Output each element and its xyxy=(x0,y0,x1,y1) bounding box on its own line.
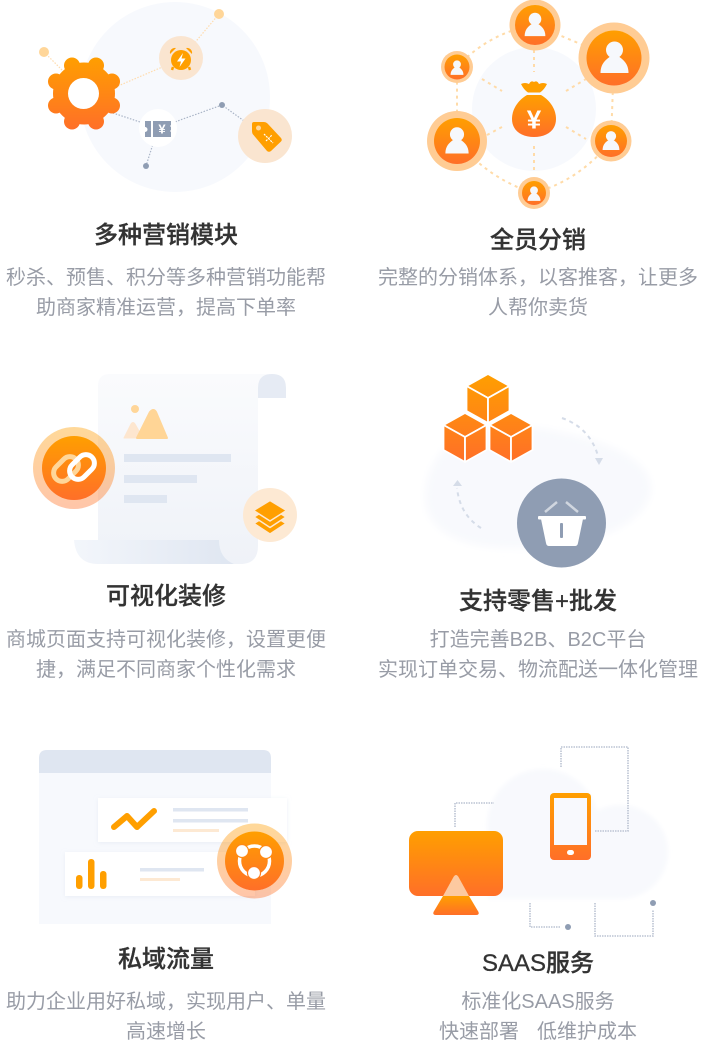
pale cloud xyxy=(487,769,668,899)
heading: 全员分销 xyxy=(490,227,586,254)
description xyxy=(6,267,326,319)
slate dots xyxy=(143,102,225,169)
peach dots xyxy=(39,9,224,57)
illustration: cloud and devices xyxy=(409,746,656,937)
illustration: browser window xyxy=(39,750,292,902)
icon: money bag xyxy=(512,81,556,137)
pale blob xyxy=(425,426,651,548)
card: line chart xyxy=(98,798,287,842)
image placeholder xyxy=(124,405,167,438)
avatar: small left xyxy=(441,51,473,83)
arrow: cubes to basket xyxy=(562,418,603,465)
heading: 支持零售+批发 xyxy=(459,588,617,615)
panel: team distribution xyxy=(378,0,698,319)
heading: 私域流量 xyxy=(118,946,214,973)
avatar: bottom xyxy=(518,177,550,209)
illustration: cubes and basket xyxy=(444,375,606,568)
icon: gear xyxy=(48,58,120,130)
top scroll curl xyxy=(258,374,286,398)
description: 商城页面支持可视化装修，设置更便 xyxy=(6,629,326,651)
description xyxy=(378,629,698,681)
icon: stacked cubes xyxy=(444,374,532,462)
avatar: large right xyxy=(578,22,650,94)
avatar: large left xyxy=(427,111,487,171)
illustration: marketing network xyxy=(39,9,292,169)
description xyxy=(378,266,698,319)
window header xyxy=(39,750,271,773)
page sheet xyxy=(98,374,272,564)
bottom scroll fold xyxy=(74,540,234,564)
window body xyxy=(39,773,271,924)
heading: SAAS服务 xyxy=(482,950,594,977)
panel: SAAS service xyxy=(409,746,656,1043)
description: 打造完善B2B、B2C平台 xyxy=(430,629,646,651)
description: 快速部署 低维护成本 xyxy=(439,1021,637,1043)
icon: layers xyxy=(243,488,297,542)
description xyxy=(6,629,326,681)
icon: basket xyxy=(517,478,606,568)
description: 助商家精准运营，提高下单率 xyxy=(36,297,296,319)
illustration: document page xyxy=(33,374,297,564)
panel: private traffic xyxy=(6,750,326,1043)
description: 高速增长 xyxy=(126,1021,206,1043)
icon: coupon: ¥ xyxy=(158,122,166,136)
description: 实现订单交易、物流配送一体化管理 xyxy=(378,659,698,681)
card: bar chart xyxy=(65,852,255,896)
illustration: distribution network xyxy=(427,0,650,209)
heading: 多种营销模块 xyxy=(94,222,238,249)
icon: chain link xyxy=(33,427,115,509)
connector lines xyxy=(44,14,265,166)
description: 标准化SAAS服务 xyxy=(461,991,615,1013)
panel: marketing modules xyxy=(6,9,326,319)
description xyxy=(439,991,637,1043)
description: 秒杀、预售、积分等多种营销功能帮 xyxy=(6,267,326,289)
pale background circle xyxy=(472,47,596,171)
icon: price tag xyxy=(238,109,292,163)
heading: 可视化装修 xyxy=(106,583,226,610)
description: 助力企业用好私域，实现用户、单量 xyxy=(6,991,326,1013)
description: 完整的分销体系，以客推客，让更多 xyxy=(378,267,698,289)
pale background circle xyxy=(80,2,270,192)
description: 人帮你卖货 xyxy=(488,297,588,319)
dotted connectors xyxy=(455,747,653,936)
panel: retail and wholesale xyxy=(378,375,698,681)
description: 捷，满足不同商家个性化需求 xyxy=(36,659,296,681)
icon: share circle xyxy=(217,824,292,898)
icon: coupon xyxy=(139,109,177,147)
icon: money bag: ¥ xyxy=(527,104,542,134)
icon: phone xyxy=(550,793,591,860)
avatar: lower right xyxy=(590,120,632,162)
arrow: basket to cubes xyxy=(453,480,481,528)
icon: monitor xyxy=(409,831,503,915)
description xyxy=(6,991,326,1043)
dotted ring and spokes xyxy=(457,25,614,193)
text placeholder bars xyxy=(124,454,231,503)
icon: alarm clock xyxy=(159,36,203,80)
connector dots xyxy=(565,900,656,930)
panel: visual decoration xyxy=(6,374,326,681)
avatar: top xyxy=(510,0,560,50)
